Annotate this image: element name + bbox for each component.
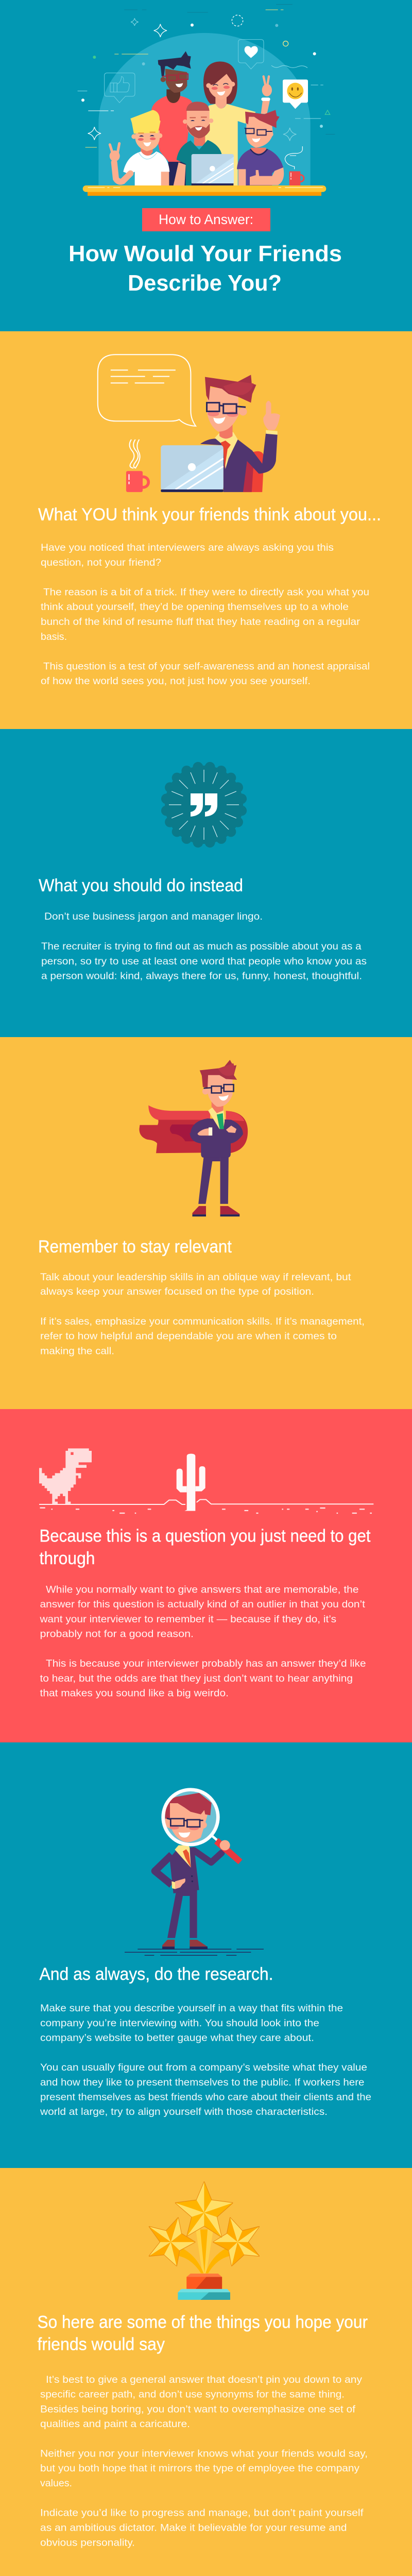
body text <box>40 2003 371 2117</box>
body text <box>41 542 370 687</box>
icon: quote badge <box>160 761 248 849</box>
body text: basis. <box>41 631 67 642</box>
panel: what friends would say <box>0 2168 412 2576</box>
body text: company you’re interviewing with. You should look into the <box>40 2018 319 2029</box>
legs and shoes <box>162 1890 208 1949</box>
body text: It’s best to give a general answer that doesn’t pin you down to any <box>46 2374 362 2385</box>
illustration: man at laptop with speech bubble <box>98 354 280 492</box>
man <box>200 375 280 492</box>
right star <box>213 2218 259 2266</box>
heading <box>37 2312 368 2354</box>
body text: You can usually figure out from a company’s website what they value <box>40 2062 367 2073</box>
body text: Make sure that you describe yourself in a way that fits within the <box>40 2003 343 2014</box>
speech bubble <box>98 354 196 426</box>
cape <box>139 1105 248 1153</box>
body text: This question is a test of your self-awareness and an honest appraisal <box>43 660 370 672</box>
shirt, tie and hands <box>198 1107 236 1136</box>
body text: want your interviewer to remember it — because if they do, it’s <box>39 1614 336 1625</box>
label: how to answer <box>142 208 270 231</box>
magnifying glass <box>163 1790 243 1864</box>
heading: Because this is a question you just need to get <box>39 1526 371 1546</box>
body text: bunch of the kind of resume fluff that they hate reading on a regular <box>41 616 360 628</box>
suit <box>155 1845 221 1893</box>
body text: a person would: kind, always there for us, funny, honest, thoughtful. <box>41 971 362 982</box>
body text: The reason is a bit of a trick. If they were to directly ask you what you <box>43 586 369 598</box>
body text: qualities and paint a caricature. <box>40 2418 190 2430</box>
icon: laptop <box>161 445 224 492</box>
body text <box>40 1272 365 1357</box>
body text: Besides being boring, you don’t want to overemphasize one set of <box>40 2404 356 2415</box>
heading: What you should do instead <box>39 876 243 895</box>
body text: think about yourself, they’d be opening themselves up to a whole <box>41 601 349 613</box>
panel: do the research <box>0 1742 412 2168</box>
icon: smiley bubble <box>283 79 308 109</box>
body text: question, not your friend? <box>41 557 161 568</box>
body text: Talk about your leadership skills in an oblique way if relevant, but <box>40 1272 351 1283</box>
center star <box>176 2182 233 2237</box>
shoes <box>192 1206 239 1216</box>
heading: And as always, do the research. <box>39 1964 273 1984</box>
person: man in red shirt <box>151 51 192 186</box>
title: How Would Your Friends <box>68 241 342 266</box>
icon: like bubble <box>105 73 135 103</box>
title <box>68 241 342 296</box>
label: how to answer: How to Answer: <box>159 212 253 227</box>
body text: always keep your answer focused on the type of position. <box>40 1286 314 1297</box>
ground specks <box>40 1508 372 1513</box>
body text: obvious personality. <box>40 2537 135 2548</box>
body text <box>39 1584 366 1699</box>
body text: This is because your interviewer probably has an answer they’d like <box>46 1658 366 1669</box>
icon: star trophy <box>149 2182 259 2300</box>
body text: and how they like to present themselves to the public. If workers here <box>40 2077 365 2088</box>
head <box>200 1060 237 1113</box>
ground lines <box>125 1949 264 1955</box>
panel: stay relevant <box>0 1037 412 1409</box>
body text: that makes you sound like a big weirdo. <box>40 1688 229 1699</box>
icon: heart bubble <box>238 40 264 69</box>
illustration: man with magnifying glass <box>125 1790 264 1955</box>
heading: friends would say <box>37 2335 165 2354</box>
star beams <box>179 2229 230 2273</box>
ground <box>39 1500 373 1504</box>
person: bearded man in teal <box>174 101 222 185</box>
body text: making the call. <box>40 1346 114 1357</box>
body text: The recruiter is trying to find out as much as possible about you as a <box>41 941 362 952</box>
body text: of how the world sees you, not just how you see yourself. <box>41 675 311 687</box>
panel: what you think <box>0 331 412 729</box>
panel: get through <box>0 1409 412 1742</box>
body text: Don’t use business jargon and manager lingo. <box>44 911 263 922</box>
body text: While you normally want to give answers that are memorable, the <box>46 1584 358 1595</box>
body text: to hear, but the odds are that they just don’t want to hear anything <box>40 1673 353 1684</box>
heading: through <box>39 1549 95 1568</box>
person: man with glasses in purple <box>237 110 284 185</box>
body text <box>40 2374 368 2548</box>
dinosaur <box>39 1448 92 1504</box>
title: Describe You? <box>128 270 282 296</box>
body text: present themselves as best friends who care about their clients and the <box>40 2092 371 2103</box>
icon: red mug with steam <box>285 146 304 186</box>
dome backdrop <box>98 33 311 187</box>
body text: but you both hope that it mirrors the type of employee the company <box>40 2463 359 2474</box>
left star <box>149 2218 195 2266</box>
panel: header <box>0 0 412 331</box>
body text: specific career path, and don’t use synonyms for the same thing. <box>40 2388 345 2400</box>
body text: refer to how helpful and dependable you are when it comes to <box>40 1330 337 1342</box>
heading: Remember to stay relevant <box>38 1237 232 1257</box>
body text: If it’s sales, emphasize your communication skills. If it’s management, <box>40 1316 365 1327</box>
heading: What YOU think your friends think about you... <box>38 505 381 524</box>
body text: Indicate you’d like to progress and manage, but don’t paint yourself <box>40 2507 364 2518</box>
illustration: superhero businessman <box>139 1060 248 1216</box>
cactus <box>177 1454 205 1511</box>
body text: company’s website to better gauge what they care about. <box>40 2032 314 2043</box>
body text: as an ambitious dictator. Make it believable for your resume and <box>40 2522 347 2534</box>
person: woman in yellow top <box>203 61 272 186</box>
body text: probably not for a good reason. <box>40 1628 194 1639</box>
body text: person, so try to use at least one word that people who know you as <box>41 956 367 967</box>
decorative sparkles, dots and lines <box>78 5 335 147</box>
body text: Have you noticed that interviewers are always asking you this <box>41 542 334 553</box>
table <box>83 185 326 196</box>
body text: values. <box>40 2478 72 2489</box>
body text: world at large, try to align yourself with those characteristics. <box>40 2106 328 2117</box>
suit and legs <box>190 1118 243 1204</box>
icon: mug with steam <box>126 439 148 492</box>
panel: what you should do instead <box>0 729 412 1037</box>
body text <box>41 911 367 982</box>
icon: laptop <box>192 154 234 185</box>
heading <box>39 1526 371 1568</box>
person: blond man in white <box>110 110 169 185</box>
pedestal <box>178 2274 230 2300</box>
body text: answer for this question is actually kind of an outlier in that you don’t <box>40 1599 366 1610</box>
illustration: pixel dinosaur and cactus <box>39 1448 373 1511</box>
heading: So here are some of the things you hope your <box>37 2312 368 2332</box>
body text: Neither you nor your interviewer knows what your friends would say, <box>40 2448 368 2460</box>
illustration: group of friends <box>78 5 335 196</box>
